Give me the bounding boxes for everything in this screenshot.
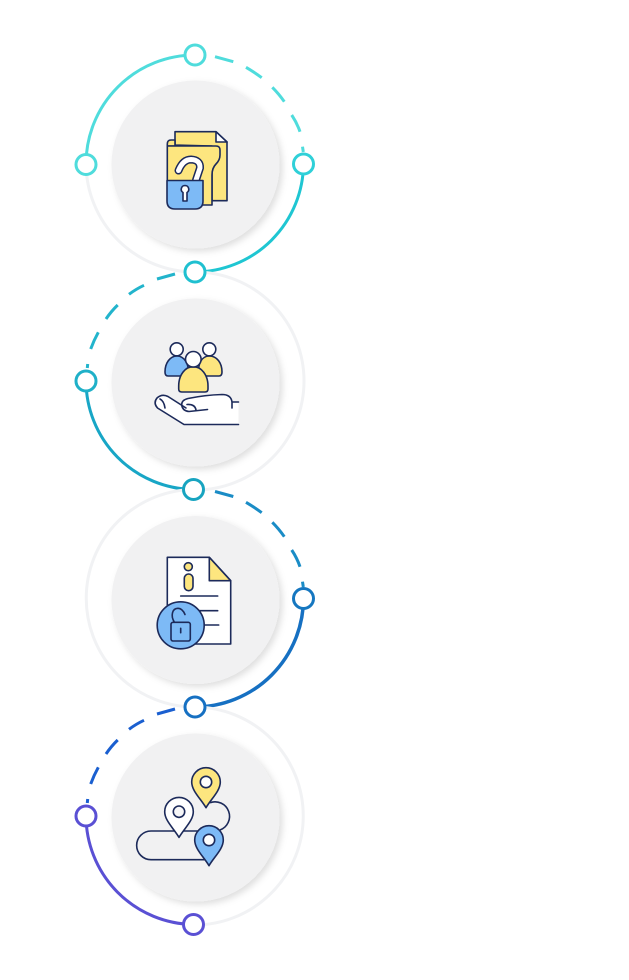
ring arc: top left solid: [86, 55, 195, 164]
gray disc: [112, 734, 280, 902]
ring arc: top left dashed: [87, 274, 175, 368]
ring arc: top right dashed: [215, 57, 303, 152]
icon: open padlock on folder: [167, 132, 227, 209]
panel: step 1 locked files: [76, 45, 314, 272]
icon: winding route and pins: [137, 768, 230, 866]
gray disc: [112, 516, 280, 684]
ring arc: top right dashed: [215, 492, 303, 587]
ring arc: top left dashed: [87, 709, 175, 803]
node: left: [76, 371, 96, 391]
node: left: [76, 806, 96, 826]
node: right: [294, 154, 314, 174]
pin: white: [165, 797, 193, 837]
node: left: [76, 154, 96, 174]
node: bottom: [184, 914, 204, 934]
gray disc: [112, 80, 280, 248]
gray disc: [112, 298, 280, 466]
panel: step 4 route with location pins: [76, 697, 303, 934]
pin: yellow: [192, 768, 220, 808]
node: right: [294, 588, 314, 608]
ring arc: bottom right solid: [195, 164, 304, 272]
panel: step 3 document with unlocked badge: [86, 480, 314, 707]
ring arc: bottom left solid: [86, 816, 193, 924]
pin: blue: [195, 826, 223, 866]
panel: step 2 people on hand: [76, 262, 304, 490]
ring arc: bottom left solid: [86, 381, 193, 490]
node: junction 1-2: [185, 262, 205, 282]
node: top: [185, 45, 205, 65]
icon: people on open hand: [155, 343, 238, 424]
icon: document with open lock: [157, 557, 231, 649]
ring arc: bottom right solid: [195, 598, 304, 707]
node: junction 3-4: [185, 697, 205, 717]
node: junction 2-3: [184, 480, 204, 500]
